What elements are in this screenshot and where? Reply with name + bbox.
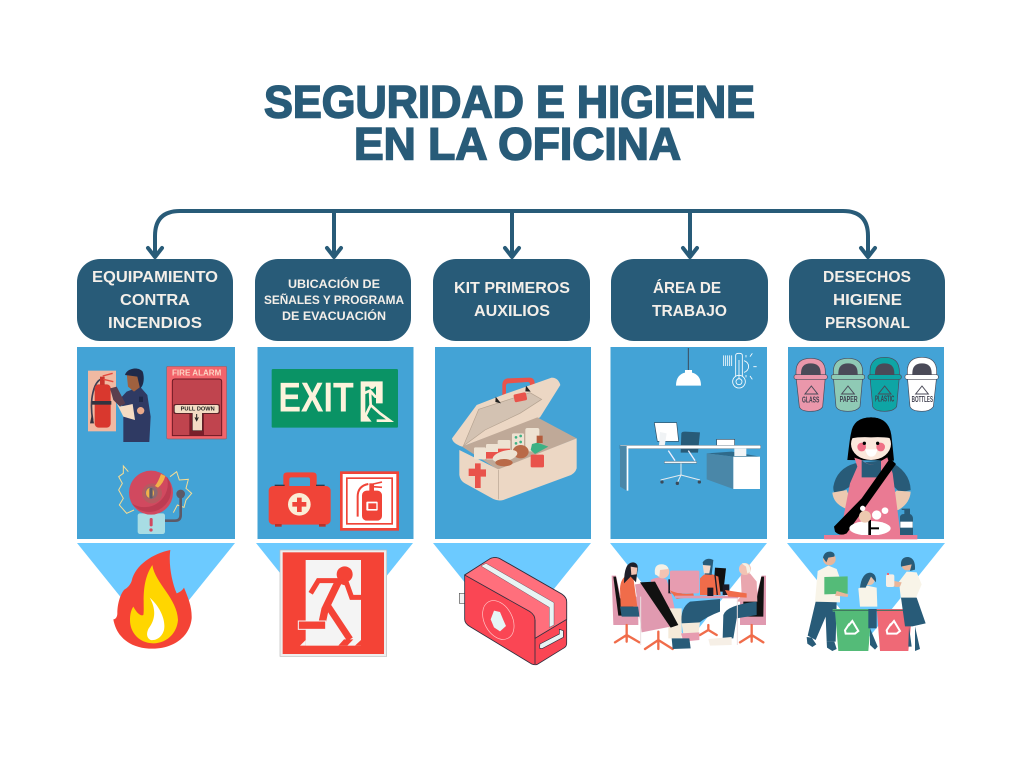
heading pill: área de trabajo — [611, 259, 768, 341]
heading pill: área de trabajo: ÁREA DE — [653, 278, 721, 297]
heading pill: kit primeros auxilios: AUXILIOS — [474, 303, 550, 320]
icon: red first aid bag — [459, 557, 567, 665]
illustration: team meeting — [612, 559, 766, 649]
funnel triangle 2 — [256, 543, 413, 641]
icon: officer inspecting extinguisher — [88, 368, 151, 442]
heading pill: área de trabajo: TRABAJO — [652, 303, 727, 320]
panel: kit background — [435, 347, 591, 539]
funnel triangle 5 — [787, 543, 945, 641]
icon: flame — [113, 550, 192, 649]
icon: fire alarm pull station — [167, 366, 227, 439]
heading pill: desechos higiene personal: HIGIENE — [833, 292, 902, 309]
heading pill: ubicación de señales: UBICACIÓN DE — [288, 276, 380, 291]
panel: área de trabajo background — [610, 347, 767, 539]
icon: fire alarm pull station: PULL DOWN — [181, 407, 215, 413]
icon: exit sign: EXIT — [278, 373, 354, 420]
heading pill: ubicación de señales: DE EVACUACIÓN — [282, 308, 386, 323]
heading pill: equipamiento contra incendios: EQUIPAMIENTO — [92, 269, 218, 286]
icon: four recycling bins: PAPER — [840, 395, 858, 404]
icon: extinguisher sign — [340, 471, 399, 531]
title: EN LA OFICINA — [354, 118, 681, 170]
funnel triangle 3 — [433, 543, 591, 641]
title — [264, 76, 755, 170]
illustration: people recycling — [807, 552, 926, 651]
icon: red emergency exit sign — [280, 550, 387, 656]
panel: equipamiento background — [77, 347, 235, 539]
funnel triangle 1 — [77, 543, 235, 641]
heading pill: ubicación de señales: SEÑALES Y PROGRAMA — [264, 292, 404, 307]
icon: four recycling bins — [794, 357, 938, 411]
icon: desk workspace — [620, 348, 761, 491]
icon: red first aid case — [269, 472, 331, 527]
heading pill: desechos higiene personal: DESECHOS — [823, 269, 911, 286]
heading pill: equipamiento contra incendios: INCENDIOS — [108, 315, 202, 332]
heading pill: desechos higiene personal — [789, 259, 945, 341]
heading pill: equipamiento contra incendios — [77, 259, 233, 341]
icon: fire alarm pull station: FIRE ALARM — [172, 369, 222, 378]
icon: alarm bell — [119, 466, 192, 534]
illustration: girl washing hands — [824, 417, 917, 539]
heading pill: equipamiento contra incendios: CONTRA — [120, 292, 190, 309]
icon: open first aid box — [452, 378, 577, 500]
icon: four recycling bins: PLASTIC — [875, 395, 894, 404]
title: SEGURIDAD E HIGIENE — [264, 76, 755, 128]
heading pill: desechos higiene personal: PERSONAL — [825, 315, 910, 332]
heading pill: ubicación de señales — [255, 259, 411, 341]
panel: desechos background — [788, 347, 944, 539]
icon: four recycling bins: GLASS — [802, 396, 820, 405]
panel: señales background — [258, 347, 414, 539]
heading pill: kit primeros auxilios — [433, 259, 590, 341]
icon: four recycling bins: BOTTLES — [912, 395, 933, 404]
heading pill: kit primeros auxilios: KIT PRIMEROS — [454, 280, 570, 297]
connector arrows — [148, 211, 875, 257]
funnel triangle 4 — [610, 543, 767, 641]
icon: exit sign — [272, 369, 398, 428]
